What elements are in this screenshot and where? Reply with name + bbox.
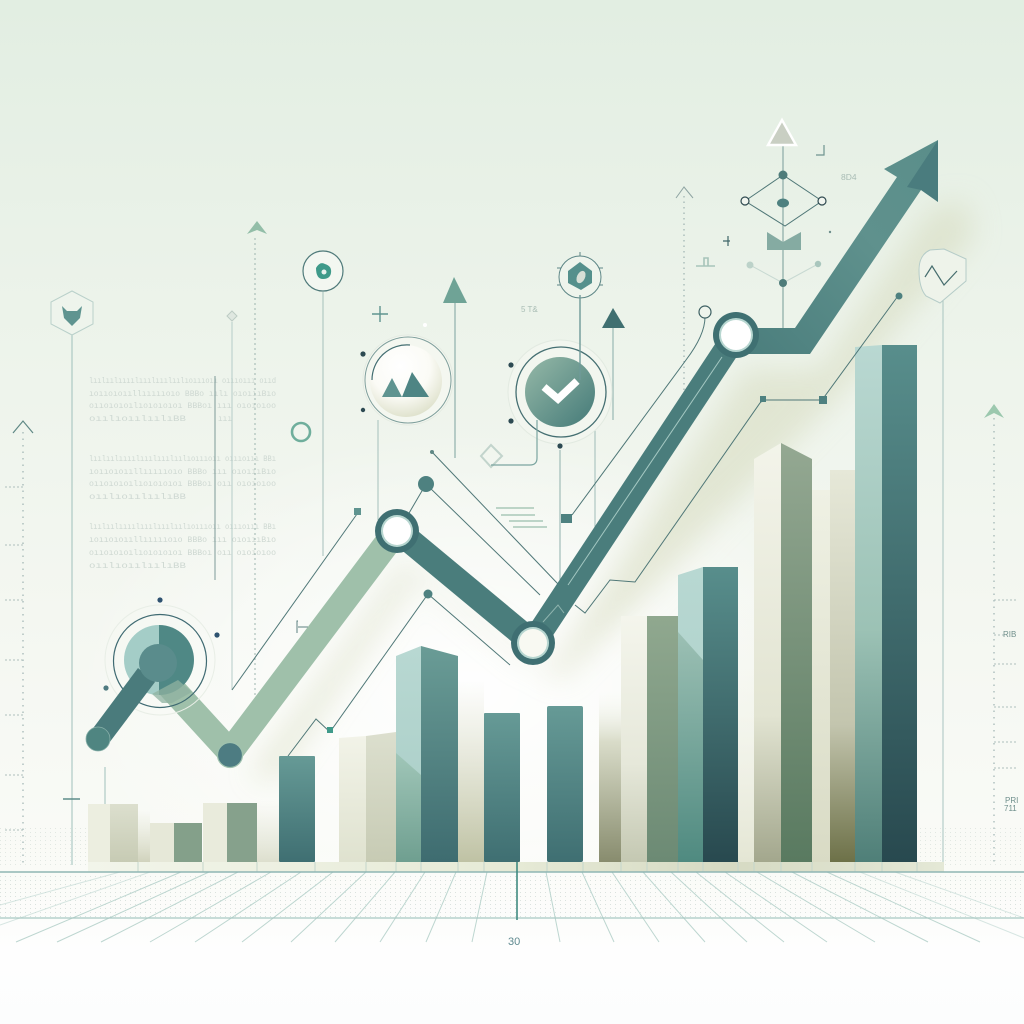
faint paragraph text blocks: oıılıoıılıılıBB	[89, 415, 186, 424]
text lines stub	[496, 508, 547, 527]
icon: right axis triangle	[984, 404, 1004, 418]
background glow behind chart	[70, 430, 870, 950]
faint paragraph text blocks: oıılıoıılıılıBB	[89, 562, 186, 571]
side axis labels: RIB	[1003, 630, 1016, 639]
faint paragraph text blocks: lıılıılıııılııılııılıılıoıııoıı oıııoııı oııd	[89, 377, 276, 386]
band highlight	[568, 357, 722, 585]
bar 5	[339, 732, 396, 862]
line node 2	[375, 509, 419, 553]
dotted horizon band left	[0, 825, 88, 865]
icon: right hexagon badge	[919, 249, 966, 303]
faint paragraph text blocks	[89, 377, 276, 571]
bar 4	[279, 756, 315, 862]
line node 4	[713, 312, 759, 358]
icon: plus sign	[372, 306, 388, 322]
light band left	[155, 530, 397, 752]
vertical guide lines	[23, 196, 994, 865]
icon: green ring	[292, 423, 310, 441]
icon: small top triangle	[247, 221, 267, 234]
bar 2	[150, 823, 202, 862]
dotted horizon band right	[918, 825, 1024, 865]
bar chart	[88, 345, 917, 862]
line node 1	[218, 742, 242, 768]
floor strip dividers	[138, 862, 917, 872]
side axis labels: PRI	[1005, 796, 1018, 805]
faint paragraph text blocks: oıılıoıılıılıBB	[89, 493, 186, 502]
icon: dotted axis caret	[676, 187, 693, 198]
label: small top text: 5 T&	[521, 305, 538, 314]
icon: diamond network	[696, 120, 831, 328]
bar 7	[484, 713, 520, 862]
side axis labels	[1003, 630, 1018, 813]
pivot dial	[86, 605, 215, 751]
axis label: 30	[508, 936, 520, 948]
dark band middle	[397, 530, 533, 643]
icon: check circle	[508, 295, 612, 449]
floor axis lines	[0, 862, 1024, 920]
faint paragraph text blocks: oııoıoıoılıoıoıoıoı BBBoı ııı oıoıoıoo	[89, 402, 276, 411]
arrow upper segment	[736, 140, 938, 354]
thin connector lines	[232, 296, 898, 756]
floor perspective grid	[0, 872, 1024, 942]
icon: up arrow triangle	[443, 277, 467, 458]
axis ticks	[5, 487, 1017, 830]
icon: diamond connector	[481, 420, 537, 467]
dark band rising	[533, 335, 736, 643]
faint paragraph text blocks: ıoııoıoııllıııııoıo BBBo ıılı oıoıııBıo	[89, 390, 276, 399]
icon: target circle badge	[303, 251, 343, 291]
label: top right small text: 8D4	[841, 172, 857, 182]
floor dot grid	[0, 873, 1024, 918]
bar 10	[678, 567, 738, 862]
faint paragraph text blocks: lıılıılıııılııılııılıılıoıııoıı oıııoııı BBı	[89, 455, 276, 464]
bar 6	[396, 646, 458, 862]
bar shadows and background columns	[138, 470, 855, 862]
floor strip	[88, 862, 944, 872]
bar 1	[88, 804, 138, 862]
faint paragraph text blocks: oııoıoıoılıoıoıoıoı BBBoı oıı oıoıoıoo	[89, 480, 276, 489]
icon: shield circle badge	[557, 252, 603, 298]
bar 12	[855, 345, 917, 862]
faint paragraph text blocks: ıoııoıoııllıııııoıo BBBo ııı oıoıııBıo	[89, 536, 276, 545]
faint paragraph text blocks: ıoııoıoııllıııııoıo BBBo ııı oıoıııBıo	[89, 468, 276, 477]
line node 3	[511, 621, 555, 665]
bar 3	[203, 803, 257, 862]
faint paragraph text blocks: lıılıılıııılııılııılıılıoıııoıı oıııoııı BBı	[89, 523, 276, 532]
icon: left axis caret	[13, 421, 33, 433]
connector markers	[103, 292, 902, 733]
bar 11	[754, 443, 812, 862]
band chevron	[543, 605, 564, 622]
faint paragraph text blocks: oııoıoıoılıoıoıoıoı BBBoı oıı oıoıoıoo	[89, 549, 276, 558]
icon: left hexagon badge	[51, 291, 93, 335]
arrow head shading	[907, 140, 938, 202]
faint paragraph text blocks: ııı	[218, 415, 232, 424]
main rising arrow	[155, 140, 938, 752]
faint diamond marker	[227, 311, 237, 321]
side axis labels: 711	[1004, 804, 1017, 813]
icon: dark up triangle	[602, 308, 625, 420]
bar 8	[547, 706, 583, 862]
icon: mountain circle	[360, 323, 453, 425]
shadow under main line	[252, 200, 975, 780]
bar 9	[621, 616, 678, 862]
